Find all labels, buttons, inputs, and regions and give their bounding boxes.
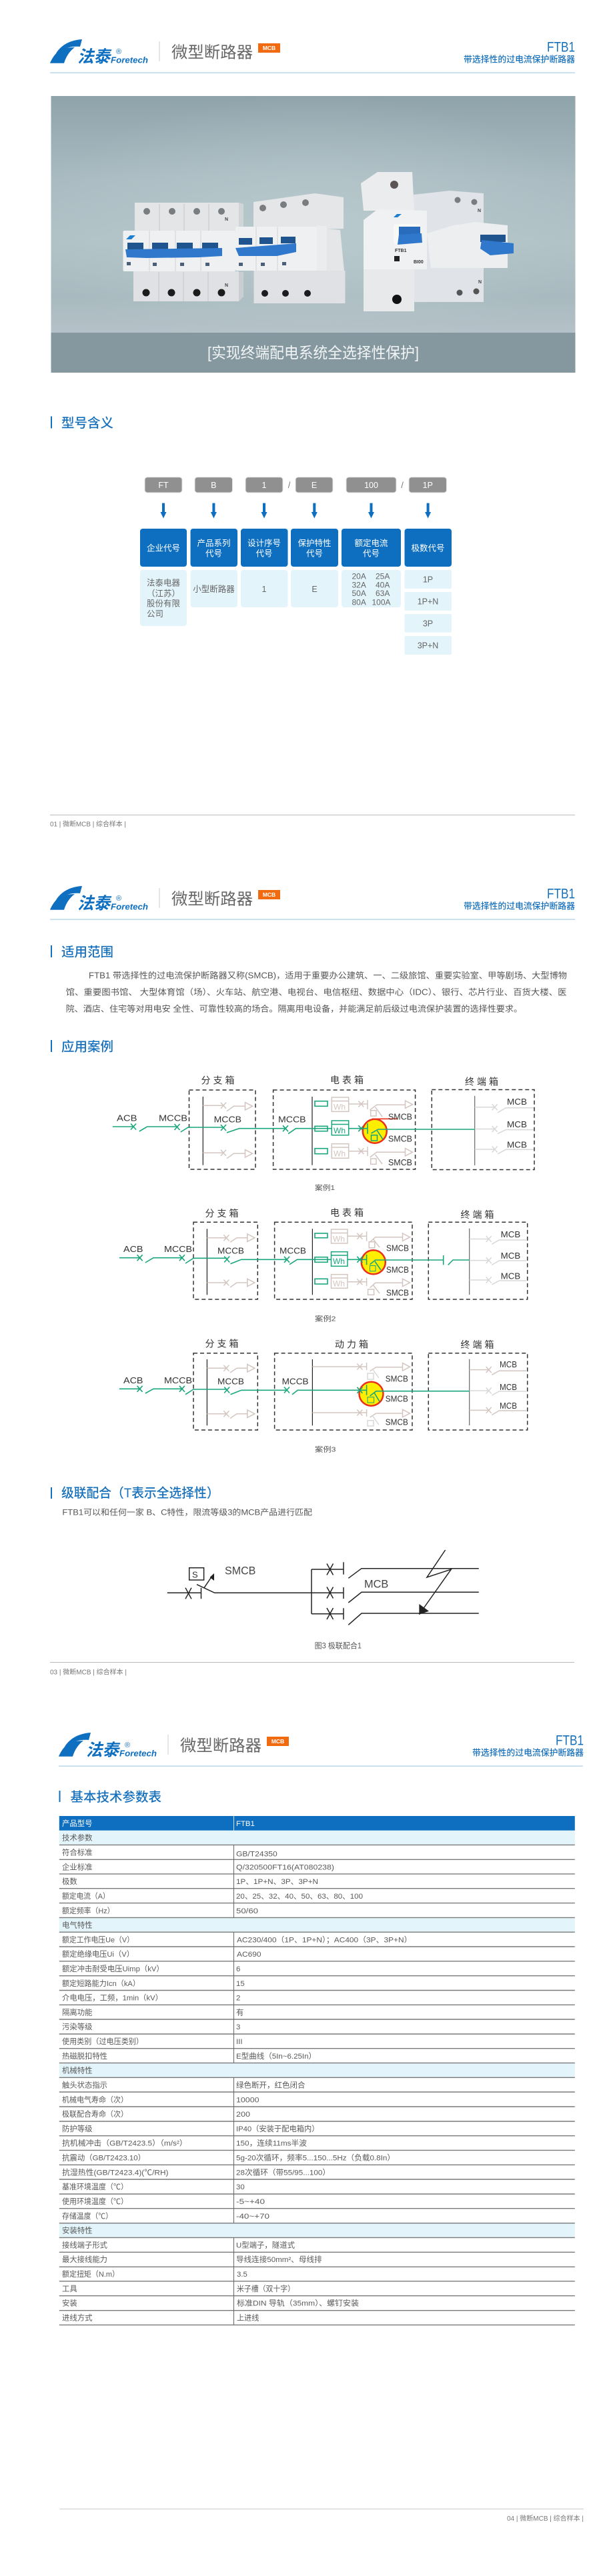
model subtitle: 带选择性的过电流保护断路器 bbox=[464, 55, 575, 64]
component labels: MCCB bbox=[159, 1113, 187, 1123]
meter labels: Wh bbox=[333, 1235, 345, 1244]
fuses bbox=[315, 1101, 328, 1154]
MCB badge bbox=[258, 43, 280, 53]
model code chips: 100 bbox=[364, 481, 378, 490]
active selective fault path bbox=[119, 1252, 367, 1266]
light value cells: 32A bbox=[352, 580, 366, 589]
component labels: SMCB bbox=[386, 1265, 409, 1275]
table text: parameter names: 介电电压，工频，1min（kV） bbox=[62, 1993, 163, 2003]
model name: FTB1 bbox=[556, 1733, 584, 1748]
table text: parameter names: 额定电流（A） bbox=[62, 1891, 110, 1901]
light value cells: 1P bbox=[423, 575, 433, 584]
table text: parameter values: III bbox=[236, 2038, 243, 2046]
light value cells: （江苏） bbox=[147, 588, 180, 599]
component labels bbox=[123, 1359, 517, 1427]
section bands bbox=[59, 1831, 575, 2237]
model code chips: / bbox=[288, 480, 291, 490]
light value cells: 50A bbox=[352, 589, 366, 598]
table text: parameter names: 安装特性 bbox=[62, 2226, 93, 2235]
table text: parameter names: 基准环境温度（℃） bbox=[62, 2182, 128, 2191]
dashed enclosures bbox=[193, 1222, 528, 1299]
meter labels bbox=[334, 1103, 346, 1159]
scope paragraph: FTB1 带选择性的过电流保护断路器又称(SMCB)，适用于重要办公建筑、一、二级旅馆、重要实验室、甲等剧场、大型博物 bbox=[89, 971, 567, 980]
box titles: 分支箱 bbox=[205, 1339, 241, 1349]
component labels: MCCB bbox=[278, 1114, 306, 1124]
component labels: MCB bbox=[507, 1140, 527, 1150]
model code chips: 1 bbox=[262, 481, 267, 490]
table text: parameter values: 2 bbox=[236, 1995, 240, 2003]
table text: parameter names: 额定绝缘电压Ui（V） bbox=[62, 1949, 134, 1959]
component labels: MCCB bbox=[279, 1246, 306, 1256]
case 1 caption: 案例1 bbox=[315, 1183, 335, 1192]
box titles: 电表箱 bbox=[330, 1075, 366, 1085]
meter labels: Wh bbox=[334, 1149, 346, 1159]
MCB badge bbox=[258, 890, 280, 899]
logo: 法泰 bbox=[77, 48, 112, 67]
heading: model meaning: 型号含义 bbox=[61, 416, 113, 431]
table text: parameter values: GB/T24350 bbox=[236, 1851, 277, 1859]
meter labels: Wh bbox=[334, 1126, 346, 1135]
table text: parameter names: 额定工作电压Ue（V） bbox=[62, 1935, 134, 1944]
box titles: 动力箱 bbox=[335, 1339, 371, 1349]
dashed enclosures bbox=[193, 1353, 528, 1430]
table text: parameter values: 绿色断开，红色闭合 bbox=[236, 2080, 306, 2089]
case 2 caption: 案例2 bbox=[315, 1315, 336, 1323]
table text: parameter values: 5g-20次循环，频率5...150...5Hz（负载0.8In） bbox=[236, 2153, 395, 2163]
blue header cells: 设计序号 bbox=[247, 538, 281, 548]
model code chips: 1P bbox=[423, 481, 433, 490]
table text: parameter names: 极数 bbox=[62, 1877, 77, 1886]
table text: parameter names: 隔离功能 bbox=[62, 2007, 93, 2017]
table text: parameter names: 机械电气寿命（次） bbox=[62, 2095, 128, 2104]
busbars bbox=[207, 1229, 470, 1295]
2-pole breaker: N bbox=[478, 280, 482, 285]
photo caption band: [实现终端配电系统全选择性保护] bbox=[207, 344, 419, 361]
active selective fault path bbox=[119, 1386, 367, 1395]
product photo bbox=[51, 96, 575, 333]
inactive branch circuits bbox=[207, 1229, 410, 1295]
case 2 diagram bbox=[119, 1207, 528, 1323]
page 1 bbox=[50, 39, 575, 828]
fuses bbox=[315, 1233, 328, 1284]
table text: parameter names: 工具 bbox=[62, 2285, 77, 2293]
header bbox=[50, 886, 575, 920]
component labels: MCCB bbox=[282, 1377, 309, 1387]
table text: parameter values: 3.5 bbox=[237, 2271, 247, 2279]
model code diagram bbox=[140, 477, 452, 655]
table text: parameter names: 使用类别（过电压类别） bbox=[62, 2037, 143, 2046]
component labels: SMCB bbox=[388, 1111, 412, 1121]
component labels: MCB bbox=[500, 1401, 517, 1411]
light value cells: 3P+N bbox=[418, 641, 438, 651]
table text: parameter values: 有 bbox=[236, 2007, 243, 2017]
case 3 diagram bbox=[119, 1339, 528, 1453]
component labels bbox=[123, 1229, 520, 1297]
footer page 04: 04 | 微断MCB | 综合样本 | bbox=[507, 2514, 584, 2523]
light value cells: 3P bbox=[423, 619, 433, 628]
light value cells: 公司 bbox=[147, 609, 163, 619]
table text: parameter values: 1P、1P+N、3P、3P+N bbox=[236, 1878, 318, 1886]
light value cells: 63A bbox=[376, 589, 390, 598]
component labels: MCCB bbox=[214, 1114, 241, 1124]
blue header cells: 企业代号 bbox=[147, 543, 180, 553]
logo: Foretech bbox=[111, 901, 148, 912]
component labels: ACB bbox=[117, 1113, 137, 1123]
MCB badge bbox=[267, 1737, 289, 1746]
meter labels: Wh bbox=[333, 1279, 345, 1288]
inactive branch circuits bbox=[207, 1363, 410, 1419]
blue header cells: 极数代号 bbox=[411, 543, 445, 553]
logo bbox=[50, 39, 148, 67]
table text: parameter names: 额定频率（Hz） bbox=[62, 1906, 115, 1915]
blue header cells: 产品系列 bbox=[197, 539, 231, 548]
MCB label: MCB bbox=[364, 1577, 388, 1591]
heading: application cases: 应用案例 bbox=[61, 1040, 113, 1055]
table header row bbox=[59, 1816, 575, 1831]
table text: parameter names: 接线端子形式 bbox=[62, 2240, 108, 2249]
component labels: MCCB bbox=[217, 1377, 244, 1387]
box titles: 电表箱 bbox=[330, 1207, 366, 1218]
blue header cells: 保护特性 bbox=[297, 538, 332, 548]
heading: scope: 适用范围 bbox=[61, 945, 113, 960]
page 2 bbox=[50, 886, 575, 1676]
SMCB label: SMCB bbox=[225, 1564, 255, 1577]
model code chips bbox=[145, 477, 447, 493]
table text: parameter names: 抗机械冲击（GB/T2423.5）（m/s²） bbox=[62, 2139, 187, 2148]
selective breaker highlight bbox=[357, 1382, 470, 1406]
active selective fault path bbox=[113, 1121, 368, 1135]
component labels: MCB bbox=[501, 1251, 520, 1261]
table text: parameter names: 企业标准 bbox=[62, 1862, 93, 1871]
logo: ® bbox=[125, 1741, 130, 1749]
component labels: SMCB bbox=[386, 1373, 408, 1383]
component labels: ACB bbox=[123, 1244, 143, 1254]
heading: cascade coordination: 级联配合（T表示全选择性） bbox=[61, 1486, 219, 1501]
table text: parameter names: 使用环境温度（℃） bbox=[62, 2197, 128, 2206]
table text: parameter values: 20、25、32、40、50、63、80、100 bbox=[236, 1893, 363, 1901]
table text: parameter names: 进线方式 bbox=[62, 2313, 93, 2322]
MCB badge: MCB bbox=[263, 891, 275, 898]
1-pole breaker bbox=[361, 172, 427, 311]
busbars bbox=[207, 1359, 470, 1425]
meter labels bbox=[333, 1235, 345, 1288]
case 1 diagram bbox=[113, 1075, 534, 1192]
photo caption band bbox=[51, 333, 575, 373]
light value cells: 1 bbox=[262, 585, 267, 594]
product category title: 微型断路器 bbox=[171, 44, 253, 61]
component labels bbox=[117, 1097, 527, 1167]
MCB badge: MCB bbox=[263, 45, 275, 51]
2-pole breaker bbox=[414, 191, 514, 302]
component labels: MCB bbox=[501, 1271, 520, 1281]
table text: parameter values: 3 bbox=[236, 2023, 240, 2031]
light value cells: 股份有限 bbox=[147, 599, 180, 608]
busbars bbox=[203, 1096, 475, 1165]
logo bbox=[59, 1733, 157, 1760]
blue header cells: 代号 bbox=[363, 549, 380, 559]
table text: parameter names: 抗湿热性(GB/T2423.4)(℃/RH) bbox=[62, 2167, 169, 2177]
selective breaker highlight bbox=[357, 1250, 470, 1274]
component labels: SMCB bbox=[386, 1243, 409, 1253]
model code chips: E bbox=[312, 481, 317, 490]
table text: parameter values: 30 bbox=[236, 2183, 245, 2191]
box titles: 分支箱 bbox=[205, 1208, 241, 1219]
light value cells: 40A bbox=[376, 580, 390, 589]
logo: ® bbox=[116, 895, 121, 903]
heading: technical parameters: 基本技术参数表 bbox=[71, 1790, 161, 1805]
table text: parameter names: 电气特性 bbox=[62, 1921, 93, 1930]
component labels: SMCB bbox=[388, 1134, 412, 1144]
model name: FTB1 bbox=[547, 40, 575, 55]
table text: parameter values: 导线连接50mm²、母线排 bbox=[236, 2255, 322, 2264]
table text: parameter values: 200 bbox=[236, 2111, 250, 2119]
light value cells: 1P+N bbox=[418, 597, 438, 607]
component labels: MCCB bbox=[164, 1244, 192, 1254]
model subtitle: 带选择性的过电流保护断路器 bbox=[464, 901, 575, 911]
light value cells: 法泰电器 bbox=[147, 579, 180, 588]
component labels: MCCB bbox=[164, 1375, 192, 1385]
table text: parameter values: 15 bbox=[236, 1980, 245, 1988]
logo: 法泰 bbox=[86, 1741, 121, 1760]
table text: parameter names: 热磁脱扣特性 bbox=[62, 2051, 107, 2061]
box titles: 终端箱 bbox=[460, 1339, 496, 1350]
component labels: MCB bbox=[500, 1382, 517, 1392]
table text: parameter values: 米子槽（双十字） bbox=[237, 2284, 295, 2293]
schematic caption: 图3 极联配合1 bbox=[315, 1641, 362, 1651]
page 3 bbox=[59, 1733, 584, 2523]
light value cells: 100A bbox=[372, 597, 391, 607]
light value cells: E bbox=[312, 585, 318, 594]
header bbox=[59, 1733, 584, 1767]
model code chips: / bbox=[401, 480, 404, 490]
terminal outgoing circuits bbox=[470, 1236, 526, 1285]
table header row: 产品型号 bbox=[62, 1819, 93, 1828]
light value cells: 小型断路器 bbox=[193, 584, 235, 594]
blue header cells: 代号 bbox=[306, 549, 323, 559]
logo: Foretech bbox=[111, 55, 148, 65]
table text: parameter names: 技术参数 bbox=[62, 1833, 93, 1843]
1-pole breaker: BI00 bbox=[414, 260, 424, 265]
table text: parameter values: AC230/400（1P、1P+N）；AC400（3P、3P+N） bbox=[237, 1935, 412, 1944]
box titles bbox=[201, 1075, 501, 1087]
table grid bbox=[59, 1845, 575, 2325]
component labels: SMCB bbox=[386, 1394, 408, 1404]
inactive branch circuits bbox=[203, 1097, 412, 1164]
table header row: FTB1 bbox=[236, 1820, 255, 1828]
component labels: ACB bbox=[123, 1375, 143, 1385]
table text: parameter values: -40~+70 bbox=[236, 2213, 269, 2221]
table text: parameter names: 污染等级 bbox=[62, 2022, 93, 2031]
light value cells: 25A bbox=[376, 572, 390, 581]
table text: parameter values: -5~+40 bbox=[236, 2198, 265, 2206]
terminal outgoing circuits bbox=[470, 1367, 526, 1415]
blue header cells bbox=[140, 529, 452, 567]
SMCB symbol bbox=[167, 1568, 312, 1599]
table text: parameter values: 28次循环（带55/95...100） bbox=[236, 2167, 330, 2177]
blue header cells: 额定电流 bbox=[354, 538, 388, 548]
component labels: MCB bbox=[507, 1097, 527, 1107]
box titles: 终端箱 bbox=[465, 1076, 501, 1087]
header bbox=[50, 39, 575, 73]
component labels: MCB bbox=[501, 1229, 520, 1239]
product category title: 微型断路器 bbox=[171, 891, 253, 908]
logo: ® bbox=[116, 48, 121, 56]
footer page 03: 03 | 微断MCB | 综合样本 | bbox=[50, 1668, 127, 1676]
meter labels: Wh bbox=[334, 1103, 346, 1112]
component labels: SMCB bbox=[386, 1287, 409, 1297]
model code chips: FT bbox=[158, 481, 169, 490]
table text: parameter names: 额定扭矩（N.m） bbox=[62, 2269, 119, 2279]
MCB badge: MCB bbox=[271, 1738, 284, 1745]
light value cells: 20A bbox=[352, 572, 366, 581]
table text: parameter names: 安装 bbox=[62, 2299, 77, 2308]
table text: parameter names: 触头状态指示 bbox=[62, 2080, 107, 2089]
4-pole breaker: N bbox=[225, 217, 228, 222]
table text: parameter values: 150，连续11ms半波 bbox=[236, 2139, 308, 2148]
cascade description: FTB1可以和任何一家 B、C特性，限流等级3的MCB产品进行匹配 bbox=[62, 1507, 312, 1517]
table text: parameter names: 额定短路能力Icn（kA） bbox=[62, 1979, 140, 1988]
table text: parameter values: Q/320500FT16(AT080238) bbox=[236, 1863, 334, 1871]
MCB symbols bbox=[312, 1562, 479, 1625]
table text: parameter values: IP40（安装于配电箱内） bbox=[236, 2124, 319, 2133]
table text: parameter names: 机械特性 bbox=[62, 2066, 93, 2075]
table text: parameter values: 6 bbox=[236, 1965, 240, 1973]
box titles: 分支箱 bbox=[201, 1075, 237, 1085]
table text: parameter names: 最大接线能力 bbox=[62, 2255, 107, 2264]
scope paragraph: 馆、重要图书馆、 大型体育馆（场）、火车站、航空港、电视台、电信枢纽、数据中心（IDC）、银行、芯片行业、百货大楼、医 bbox=[66, 987, 567, 997]
meter labels: Wh bbox=[333, 1257, 345, 1266]
terminal outgoing circuits bbox=[475, 1104, 534, 1154]
product category title: 微型断路器 bbox=[180, 1737, 261, 1755]
table text: parameter values: U型端子，隧道式 bbox=[236, 2240, 295, 2249]
blue header cells: 代号 bbox=[255, 549, 273, 559]
4-pole breaker: N bbox=[225, 283, 228, 288]
component labels: MCB bbox=[500, 1359, 517, 1369]
table text: parameter names: 额定冲击耐受电压Uimp（kV） bbox=[62, 1964, 164, 1973]
down arrows bbox=[160, 503, 431, 519]
table text: parameter names: 符合标准 bbox=[62, 1848, 93, 1857]
light value cells bbox=[140, 570, 452, 655]
logo: Foretech bbox=[119, 1748, 157, 1759]
component labels: SMCB bbox=[388, 1157, 412, 1167]
model code chips: B bbox=[211, 481, 216, 490]
case 3 caption: 案例3 bbox=[315, 1445, 336, 1453]
table text: parameter values: 标准DIN 导轨（35mm）、螺钉安装 bbox=[237, 2299, 359, 2308]
table text: parameter names bbox=[62, 1833, 187, 2322]
4-pole breaker bbox=[123, 203, 243, 301]
dashed enclosures bbox=[189, 1089, 534, 1169]
model subtitle: 带选择性的过电流保护断路器 bbox=[472, 1748, 584, 1757]
component labels: MCCB bbox=[217, 1246, 244, 1256]
blue header cells: 代号 bbox=[205, 549, 222, 559]
selective breaker highlight bbox=[362, 1119, 475, 1143]
table text: parameter values: AC690 bbox=[237, 1951, 261, 1959]
cascade schematic bbox=[167, 1550, 479, 1625]
table text: parameter names: 防护等级 bbox=[62, 2124, 93, 2133]
box titles: 终端箱 bbox=[460, 1209, 496, 1220]
table text: parameter values: E型曲线（5In~6.25In） bbox=[236, 2051, 316, 2061]
scope paragraph: 院、酒店、住宅等对用电安 全性、可靠性较高的场合。隔离用电设备，并能满足前后级过电流保护装置的选择性要求。 bbox=[66, 1004, 522, 1013]
logo bbox=[50, 886, 148, 913]
logo: 法泰 bbox=[77, 895, 112, 913]
fault arrow bbox=[419, 1550, 451, 1615]
component labels: SMCB bbox=[386, 1417, 408, 1427]
cascade schematic: S bbox=[192, 1569, 198, 1580]
footer page 01: 01 | 微断MCB | 综合样本 | bbox=[50, 820, 126, 828]
scope paragraph bbox=[66, 971, 567, 1013]
table text: parameter values: 50/60 bbox=[236, 1907, 258, 1915]
technical parameter table bbox=[59, 1816, 575, 2325]
table text: parameter names: 极联配合寿命（次） bbox=[62, 2109, 128, 2119]
component labels: MCB bbox=[507, 1119, 527, 1129]
inactive SMCB indicators bbox=[368, 1369, 379, 1426]
3-pole breaker bbox=[235, 193, 346, 303]
1-pole breaker: FTB1 bbox=[395, 249, 407, 253]
table text: parameter values bbox=[236, 1851, 412, 2322]
model name: FTB1 bbox=[547, 887, 575, 901]
2-pole breaker: N bbox=[478, 209, 481, 213]
table text: parameter names: 存储温度（℃） bbox=[62, 2211, 113, 2221]
table text: parameter values: 10000 bbox=[236, 2096, 259, 2104]
table text: parameter names: 抗震动（GB/T2423.10） bbox=[62, 2153, 145, 2163]
box titles bbox=[205, 1207, 496, 1220]
box titles bbox=[205, 1339, 496, 1350]
light value cells: 80A bbox=[352, 597, 366, 607]
table text: parameter values: 上进线 bbox=[237, 2313, 259, 2322]
